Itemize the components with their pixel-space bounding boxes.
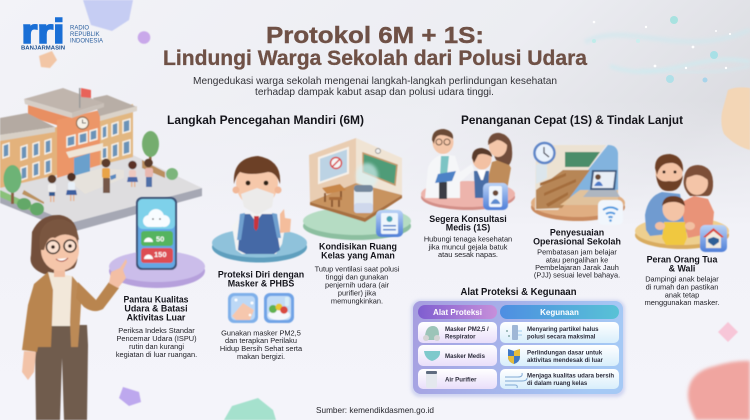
- row: medical mask: Perlindungan dasar untuk: [527, 350, 603, 356]
- header: use column: [500, 305, 619, 319]
- subtitle: [193, 76, 557, 98]
- block: Penyesuaian Operasional: Penyesuaian: [550, 228, 604, 238]
- title: Lindungi Warga Sekolah dari Polusi Udara: [163, 47, 587, 70]
- icon: air quality badge: [376, 210, 403, 237]
- block: Pantau Kualitas: Udara & Batasi: [124, 304, 188, 314]
- row: respirator: Masker PM2,5 /: [445, 326, 489, 333]
- block: Peran Orang Tua: Peran Orang Tua: [647, 254, 717, 264]
- row: medical mask: aktivitas mendesak di luar: [527, 357, 603, 364]
- header: use column: Kegunaan: [540, 308, 579, 317]
- source: Sumber: kemendikdasmen.go.id: [316, 406, 434, 415]
- block: Pantau Kualitas: Pencemar Udara (ISPU): [116, 334, 197, 343]
- decorative air wave and particles: [585, 16, 750, 83]
- row: air purifier: [418, 369, 619, 389]
- panel: protective tools table: [411, 300, 625, 397]
- illustration: phone on purple disc: 50: [156, 234, 164, 244]
- logo: RRI Banjarmasin: RADIO: [70, 26, 89, 32]
- logo: RRI Banjarmasin: INDONESIA: [70, 38, 103, 44]
- illustration: school building: [0, 88, 202, 232]
- illustration: classroom and online learning: [531, 143, 625, 225]
- heading: 6M: Langkah Pencegahan Mandiri (6M): [167, 113, 364, 127]
- block: Kondisikan Ruang: Tutup ventilasi saat polusi: [315, 264, 400, 274]
- block: Proteksi Diri: [218, 270, 304, 361]
- block: Penyesuaian Operasional: [533, 228, 621, 280]
- block: Peran Orang Tua: anak tetap: [665, 290, 699, 300]
- block: Kondisikan Ruang: Kelas yang Aman: [321, 250, 395, 260]
- illustration: teacher: [22, 215, 127, 420]
- heading: Alat Proteksi: Alat Proteksi & Kegunaan: [460, 286, 576, 298]
- illustration: phone on purple disc: 150: [154, 250, 167, 259]
- block: Proteksi Diri: Masker & PHBS: [228, 278, 294, 288]
- block: Kondisikan Ruang: [315, 242, 400, 306]
- block: Segera Konsultasi: Segera Konsultasi: [429, 214, 507, 224]
- header: tool column: [418, 305, 497, 319]
- block: Penyesuaian Operasional: Pembatasan jam belajar: [537, 248, 617, 256]
- icon: healthy food: [264, 293, 294, 323]
- row: medical mask: [418, 345, 619, 366]
- block: Kondisikan Ruang: tinggi dan gunakan: [326, 272, 388, 282]
- logo: RRI Banjarmasin: [21, 13, 103, 52]
- block: Segera Konsultasi: [424, 214, 512, 259]
- block: Penyesuaian Operasional: atau pengalihan ke: [546, 256, 608, 264]
- block: Proteksi Diri: Proteksi Diri dengan: [218, 270, 304, 280]
- block: Kondisikan Ruang: penjernih udara (air: [325, 280, 390, 290]
- block: Pantau Kualitas: rutin dan kurangi: [129, 342, 184, 351]
- block: Pantau Kualitas: kegiatan di luar ruangan.: [116, 350, 197, 359]
- heading: 1S: Penanganan Cepat (1S) & Tindak Lanjut: [461, 113, 683, 127]
- row: respirator: [418, 322, 619, 343]
- subtitle: Mengedukasi warga sekolah mengenai langkah-langkah perlindungan kesehatan: [193, 76, 557, 87]
- row: respirator: polusi secara maksimal: [527, 334, 596, 340]
- row: respirator: Respirator: [445, 334, 476, 340]
- illustration: phone on purple disc: [109, 197, 205, 288]
- illustration: classroom with air purifier: [303, 138, 411, 240]
- title: Protokol 6M + 1S:: [266, 22, 484, 48]
- block: Penyesuaian Operasional: Operasional Sekolah: [533, 236, 621, 246]
- block: Peran Orang Tua: & Wali: [669, 264, 695, 274]
- block: Peran Orang Tua: menggunakan masker.: [645, 298, 719, 307]
- row: air purifier: Menjaga kualitas udara bersih: [527, 372, 614, 380]
- icon: hand washing: [228, 293, 258, 323]
- header: tool column: Alat Proteksi: [433, 308, 482, 317]
- block: Penyesuaian Operasional: Pembelajaran Jarak Jauh: [535, 263, 619, 272]
- logo: RRI Banjarmasin: REPUBLIK: [70, 32, 100, 38]
- block: Peran Orang Tua: [645, 254, 719, 307]
- row: air purifier: Air Purifier: [445, 376, 477, 384]
- illustration: doctor, child and mother: [421, 129, 515, 210]
- illustration: student with mask: [212, 156, 307, 262]
- block: Proteksi Diri: Hidup Bersih Sehat serta: [220, 344, 303, 353]
- block: Segera Konsultasi: atau sesak napas.: [438, 250, 498, 259]
- block: Penyesuaian Operasional: (PJJ) sesuai level bahaya.: [534, 270, 620, 280]
- row: medical mask: Masker Medis: [445, 353, 486, 360]
- block: Proteksi Diri: Gunakan masker PM2,5: [221, 328, 301, 338]
- logo: RRI Banjarmasin: BANJARMASIN: [21, 46, 65, 52]
- row: respirator: Menyaring partikel halus: [527, 326, 599, 333]
- block: Kondisikan Ruang: Kondisikan Ruang: [319, 242, 397, 252]
- block: Proteksi Diri: makan bergizi.: [237, 352, 285, 361]
- subtitle: terhadap dampak kabut asap dan polusi udara tinggi.: [255, 87, 494, 98]
- block: Peran Orang Tua: Dampingi anak belajar: [645, 274, 719, 284]
- illustration: parents and child: [635, 154, 729, 252]
- block: Pantau Kualitas: Periksa Indeks Standar: [118, 326, 195, 335]
- block: Kondisikan Ruang: memungkinkan.: [331, 296, 383, 306]
- block: Pantau Kualitas: Aktivitas Luar: [127, 312, 186, 322]
- title: [163, 22, 587, 70]
- block: Segera Konsultasi: Medis (1S): [446, 222, 490, 232]
- block: Pantau Kualitas: Pantau Kualitas: [124, 294, 189, 304]
- block: Segera Konsultasi: jika muncul gejala batuk: [428, 242, 508, 252]
- block: Segera Konsultasi: Hubungi tenaga kesehatan: [424, 234, 512, 244]
- logo: RRI Banjarmasin: rri: [22, 13, 64, 51]
- block: Pantau Kualitas: [116, 294, 197, 359]
- block: Proteksi Diri: dan terapkan Perilaku: [225, 336, 297, 345]
- row: air purifier: di dalam ruang kelas: [527, 380, 588, 387]
- block: Kondisikan Ruang: purifier) jika: [338, 288, 377, 298]
- block: Peran Orang Tua: di rumah dan pastikan: [646, 282, 718, 292]
